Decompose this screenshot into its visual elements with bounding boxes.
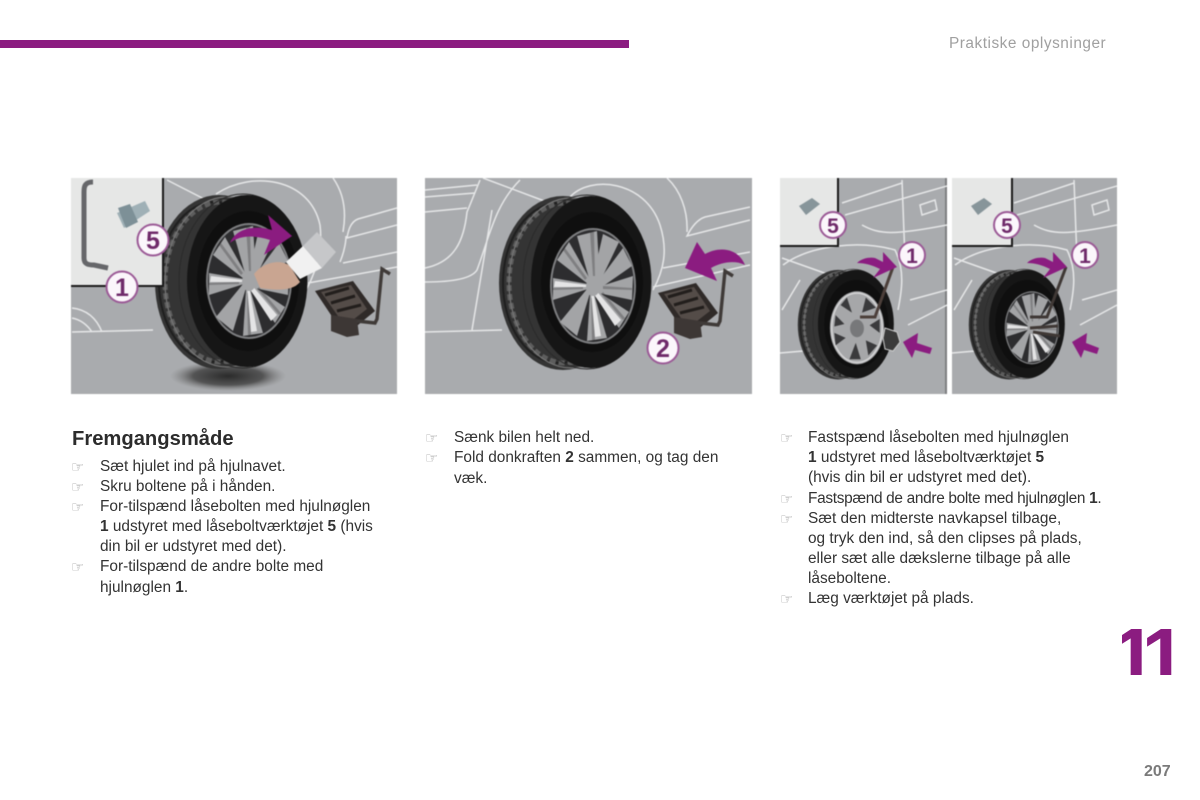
text block: column 1 [71, 458, 373, 596]
arrows [1027, 252, 1099, 358]
hand with sleeve [254, 232, 336, 290]
text block: column 1: ☞ [71, 558, 84, 576]
text block: column 3: (hvis din bil er udstyret med det). [808, 469, 1031, 486]
text block: column 2: Sænk bilen helt ned. [454, 429, 594, 446]
text block: column 1: din bil er udstyret med det). [100, 538, 286, 555]
text block: column 3 [780, 429, 1101, 608]
section title: Praktiske oplysninger [949, 35, 1106, 52]
text block: column 1: hjulnøglen 1. [100, 579, 188, 596]
page number: 207 [1144, 763, 1171, 780]
text block: column 2: ☞ [425, 449, 438, 467]
badge 5 [994, 212, 1020, 238]
text block: column 2: ☞ [425, 429, 438, 447]
wheel [798, 269, 894, 379]
text block: column 1: ☞ [71, 478, 84, 496]
text block: column 1: For-tilspænd låsebolten med hjulnøglen [100, 498, 370, 515]
text block: column 1: 1 udstyret med låseboltværktøjet 5 (hvis [100, 518, 373, 535]
text block: column 3: låseboltene. [808, 570, 891, 587]
panel: step 2 lowering car [425, 178, 752, 394]
text block: column 3: ☞ [780, 429, 793, 447]
badge 5: 5 [827, 215, 839, 238]
badge 1: 1 [906, 245, 918, 268]
badge 2: 2 [656, 335, 670, 363]
heading: Fremgangsmåde [72, 428, 234, 450]
text block: column 1: ☞ [71, 458, 84, 476]
wheel [969, 269, 1065, 379]
badge 1: 1 [1079, 245, 1091, 268]
badge 5: 5 [1001, 215, 1013, 238]
wheel [155, 194, 307, 369]
text block: column 1: For-tilspænd de andre bolte med [100, 558, 323, 575]
inset: tools [71, 178, 163, 286]
text block: column 1: ☞ [71, 498, 84, 516]
badge 1: 1 [115, 274, 129, 302]
text block: column 3: ☞ [780, 590, 793, 608]
wrench [860, 267, 893, 317]
arrow: remove jack [685, 242, 745, 281]
hub cap [883, 328, 900, 351]
badge 5: 5 [146, 227, 160, 255]
text block: column 2 [425, 429, 718, 487]
wheel shadow [174, 364, 282, 390]
text block: column 2: væk. [454, 470, 487, 487]
text block: column 1: Sæt hjulet ind på hjulnavet. [100, 458, 286, 475]
badge 2 [648, 332, 678, 364]
text block: column 3: ☞ [780, 510, 793, 528]
wheel [499, 195, 651, 370]
illustrations [70, 177, 1118, 395]
text block: column 3: Sæt den midterste navkapsel tilbage, [808, 510, 1061, 527]
arrow: tighten [230, 215, 292, 255]
inset: bolt [780, 178, 838, 246]
icon: jack [315, 269, 390, 337]
badge 5 [138, 224, 168, 256]
badge 1 [106, 272, 138, 302]
text block: column 3: Læg værktøjet på plads. [808, 590, 974, 607]
badge 5 [820, 212, 846, 238]
text block: column 2: Fold donkraften 2 sammen, og tag den [454, 449, 718, 466]
wrench and bolts [1030, 267, 1066, 336]
badge 1 [899, 242, 925, 268]
inset: bolt [952, 178, 1012, 246]
text block: column 3: og tryk den ind, så den clipses på plads, [808, 530, 1082, 547]
badge 1 [1072, 242, 1098, 268]
text block: column 1: Skru boltene på i hånden. [100, 478, 275, 495]
text block: column 3: eller sæt alle dækslerne tilbage på alle [808, 550, 1071, 567]
text block: column 3: Fastspænd låsebolten med hjulnøglen [808, 429, 1069, 446]
text block: column 3: ☞ [780, 490, 793, 508]
icon: jack [658, 271, 733, 339]
text block: column 3: Fastspænd de andre bolte med hjulnøglen 1. [808, 490, 1101, 507]
text block: column 3: 1 udstyret med låseboltværktøjet 5 [808, 449, 1044, 466]
panel: step 1 mounting wheel [71, 178, 397, 394]
arrows [857, 252, 932, 358]
panel: step 3 right tightening with bolt covers [952, 178, 1117, 394]
header bar [0, 40, 629, 48]
panel: step 3 left tightening with hub cap [780, 178, 947, 394]
